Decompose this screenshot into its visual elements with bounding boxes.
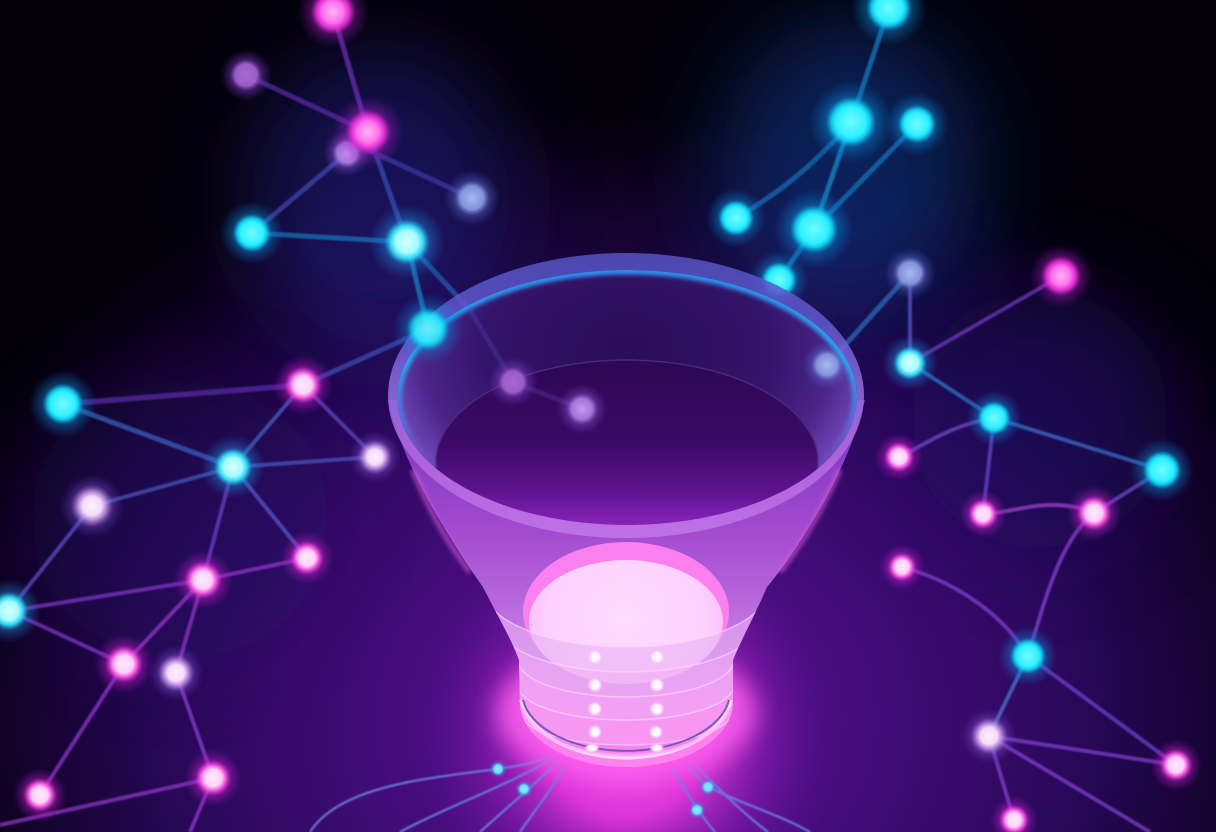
right links — [899, 273, 1176, 832]
top left nodes — [220, 0, 500, 280]
funnel body — [388, 400, 865, 767]
funnel side highlights — [412, 470, 840, 572]
funnel rim — [388, 253, 864, 538]
top right nodes — [706, 0, 949, 310]
funnel base halo — [496, 644, 756, 780]
funnel light dots — [584, 649, 665, 753]
lines fanning out from funnel base — [310, 755, 810, 832]
funnel interior wall — [397, 270, 857, 525]
links seen through glass — [470, 310, 582, 409]
node overlapping rim — [392, 293, 464, 365]
funnel — [388, 253, 865, 780]
left nodes — [0, 355, 401, 822]
base ring — [521, 700, 731, 758]
right nodes — [875, 244, 1202, 832]
interior liquid surface — [435, 359, 819, 525]
network: top right — [706, 0, 949, 365]
rim blue highlight — [397, 270, 857, 458]
glowing disc — [523, 542, 729, 684]
band edge lines — [483, 587, 769, 745]
nodes seen through glass — [488, 340, 852, 434]
fan line nodes — [489, 760, 717, 819]
top right links — [736, 8, 917, 365]
funnel stacked bands — [496, 612, 756, 767]
network: top left — [220, 0, 500, 385]
left links — [0, 385, 375, 832]
network: right — [875, 244, 1202, 832]
network: left — [0, 355, 401, 832]
bottom magenta glow under funnel — [380, 500, 870, 832]
top left links — [246, 12, 472, 385]
fan lines — [310, 755, 810, 832]
